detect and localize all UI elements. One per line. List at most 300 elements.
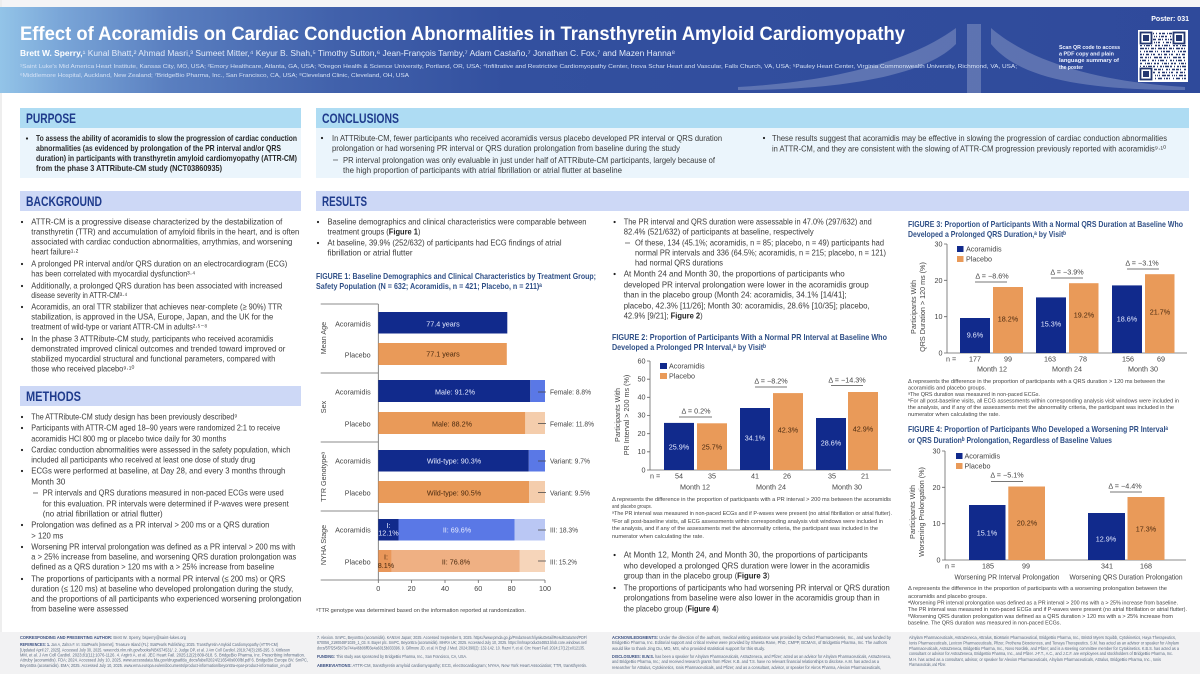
delta annotations: Δ = −8.2% — [754, 376, 788, 386]
footer: author and references: Attruby (acoramidis). FDA; 2024. Accessed July 10, 2025. www.accessdata.fda.gov/drugsatfda_docs/label/2024/216540s000lbl.pdf 6. BridgeBio Europe BV. SmPC, — [20, 658, 308, 662]
footer: references continued, funding and abbreviations: docs/5f7f2545b73e744a46b06ff03e4a6015b033396. 9. Gillmore JD, et al. N Engl J Med. 2024;390(2): 132-142. 10. Razvi Y, et al. Circ Heart Fail. 2024;17(12):e012135. — [317, 646, 585, 650]
right-hand value labels: III: 15.2% — [550, 558, 578, 566]
x axis labels: 60 — [474, 584, 482, 593]
delta annotations: Δ = −3.1% — [1125, 258, 1159, 268]
bars: month 12: 25.7% — [702, 442, 723, 452]
heading: background: BACKGROUND — [26, 193, 102, 209]
figure 2 footnotes — [612, 497, 892, 540]
background text: transthyretin (TTR) and accumulation of amyloid fibrils in the heart, and is often — [31, 226, 300, 236]
n row: 177 — [969, 354, 981, 364]
figure 2: grouped bar chart — [613, 356, 891, 492]
bars: NYHA stage: 8.1% — [378, 561, 395, 570]
treatment labels: Placebo — [345, 350, 371, 360]
background text: heart failure¹·² — [31, 246, 79, 256]
y axis title: Participants With — [909, 280, 918, 334]
figure 4 footnotes: acoramidis and placebo groups. — [908, 594, 987, 600]
results text column 1: Baseline demographics and clinical characteristics were comparable between — [328, 216, 587, 226]
footer: author and references — [20, 635, 308, 668]
n row: 156 — [1122, 354, 1134, 364]
legend: Placebo — [966, 254, 992, 264]
footer: author and references: MM, et al. J Am Coll Cardiol. 2023;81(11):1076-1126. 4. Argiró A, et al. JEC Heart Fail. 2025;12(2):809-818. 5. BridgeBio Pharma, Inc. Prescribing Information. — [20, 652, 305, 658]
n row — [945, 562, 1152, 570]
treatment labels: Placebo — [345, 488, 371, 498]
results text column 2 top: At Month 24 and Month 30, the proportions of participants who — [624, 268, 845, 278]
footer: references continued, funding and abbreviations — [317, 635, 588, 668]
bars: NYHA stage: I: — [384, 552, 388, 562]
methods text: > 120 ms — [31, 530, 63, 540]
figure 4 title — [908, 424, 1169, 445]
bars: sex: Male: 88.2% — [432, 420, 473, 428]
figure 2 title: FIGURE 2: Proportion of Participants With a Normal PR Interval at Baseline Who — [612, 332, 887, 342]
footer: disclosures continued — [909, 635, 1179, 667]
legend — [956, 452, 1000, 470]
figure 3 footnotes: ᵃThe QRS duration was measured in non-paced ECGs. — [908, 392, 1040, 398]
legend — [957, 244, 1002, 264]
results text column 2 bottom: the placebo group (Figure 4) — [624, 604, 719, 614]
figure 4: grouped bar chart — [908, 446, 1186, 582]
n row: n = — [946, 354, 956, 364]
legend: Placebo — [964, 462, 990, 470]
bars: month 24: 19.2% — [1074, 310, 1095, 320]
delta annotations — [679, 376, 866, 417]
methods text: duration (≤ 120 ms) at baseline who developed prolongation during the study, — [31, 584, 293, 594]
y axis tick labels: 40 — [638, 392, 646, 402]
footer: acknowledgments and disclosures: DISCLOSURES: B.W.S. has been a speaker for Alnylam Pharmaceuticals, AstraZeneca, and Pfizer; acted as an advisor for Alnylam Pharmaceuticals, AstraZeneca, — [612, 654, 891, 659]
legend: Acoramidis — [669, 362, 705, 370]
conclusions text left: In ATTRibute-CM, fewer participants who received acoramidis versus placebo developed PR interval or QRS duration — [332, 133, 722, 143]
poster number: Poster: 031 — [1151, 16, 1189, 23]
background text — [21, 216, 300, 374]
figure 1 title — [316, 271, 596, 291]
figure 3 footnotes: acoramidis and placebo groups. — [908, 386, 986, 392]
bars: sex: Male: 91.2% — [435, 388, 476, 396]
figure 3 footnotes: the analysis, and if any of the assessments met the abnormality criteria, the participant was included in the — [908, 405, 1174, 411]
n row: 99 — [1004, 354, 1012, 364]
methods text: Prolongation was defined as a PR interval > 200 ms or a QRS duration — [31, 520, 270, 530]
y axis tick labels: 20 — [934, 276, 942, 285]
figure 3 footnotes — [908, 379, 1179, 418]
y axis tick labels: 20 — [932, 483, 940, 492]
figure 4 footnotes: Δ represents the difference in the proportion of participants with a worsening prolongation between the — [908, 586, 1167, 592]
results text column 1: treatment groups (Figure 1) — [328, 226, 421, 236]
methods text: PR intervals and QRS durations measured in non-paced ECGs were used — [43, 488, 284, 498]
purpose text: from the phase 3 ATTRibute-CM study (NCT03860935) — [36, 163, 222, 173]
bars: TTR genotype: Wild-type: 90.3% — [427, 456, 482, 466]
y axis title: PR Interval > 200 ms (%) — [622, 375, 631, 455]
bars: worsening PR interval: 20.2% — [1017, 518, 1038, 528]
y axis tick labels: 10 — [932, 519, 940, 528]
figure 4 footnotes — [908, 586, 1187, 626]
background text: associated with cardiac conduction abnormalities, arrythmias, and worsening — [31, 236, 293, 246]
panel: results heading: RESULTS — [322, 193, 367, 209]
bars: month 30 — [1112, 274, 1174, 353]
bars: month 30: 18.6% — [1117, 314, 1138, 324]
axes — [942, 451, 1186, 560]
right-hand value labels: Female: 8.8% — [550, 388, 592, 396]
affiliations — [20, 63, 1018, 79]
n row — [946, 354, 1165, 364]
purpose text: To assess the ability of acoramidis to slow the progression of cardiac conduction — [36, 133, 297, 143]
figure 1 title: Safety Population (N = 632; Acoramidis, n = 421; Placebo, n = 211)ᵃ — [316, 281, 543, 291]
right-hand value labels: III: 18.3% — [550, 526, 579, 534]
y axis title: Participants With — [908, 485, 917, 539]
footer: references continued, funding and abbreviations: ABBREVIATIONS: ATTR-CM, transthyretin amyloid cardiomyopathy; ECG, electrocardiogram; NYHA, New York Heart Association; TTR, transthyretin. — [317, 663, 587, 668]
footer: acknowledgments and disclosures: researcher for Attralus, Cytokinetics, Ionis Pharmaceuticals, and Pfizer; and as a consultant, advisor, or speaker for Akros Pharma, Alexion Pharmaceuticals, — [612, 665, 881, 670]
y axis tick labels: 20 — [638, 429, 646, 438]
n row: 35 — [828, 472, 836, 480]
x axis labels — [376, 584, 551, 593]
n row: 35 — [708, 472, 716, 480]
purpose text: abnormalities (as evidenced by prolongation of the PR interval and/or QRS — [36, 143, 281, 153]
bars: month 30: 21.7% — [1150, 308, 1171, 316]
bars: TTR genotype: Wild-type: 90.5% — [427, 488, 482, 498]
n row: n = — [945, 562, 955, 570]
panel: results heading — [316, 191, 1189, 211]
footer: author and references: REFERENCES: 1. Jan A, Zahra F. In: StatPearls [Internet]. Treasure Island (FL): StatPearls Publishing; 2025. Transthyretin Amyloid Cardiomyopathy (ATTR-CM) — [20, 642, 278, 647]
footer: references continued, funding and abbreviations: 7. Alexion. SmPC, Beyonttra (acoramidis). KANSAI Japan; 2025. Accessed September 5, 2025. https://www.pmda.go.jp/PmdaSearch/iyakuDetail/ResultDataSet/PDF/ — [317, 635, 588, 640]
figure 3 title: Developed a Prolonged QRS Duration,ᵃ by Visitᵇ — [908, 229, 1067, 239]
results text column 2 bottom: group than in the placebo group (Figure 3) — [624, 570, 770, 580]
purpose text — [26, 133, 297, 173]
treatment labels: Acoramidis — [335, 526, 371, 534]
month labels: Month 24 — [756, 482, 786, 492]
results text column 2 bottom — [614, 550, 890, 614]
methods text: Cardiac conduction abnormalities were assessed in the safety population, which — [31, 444, 291, 454]
n row: 341 — [1101, 562, 1113, 570]
delta annotations: Δ = −3.9% — [1050, 268, 1084, 276]
panel: purpose — [20, 108, 301, 178]
methods text: The ATTRibute-CM study design has been previously described⁹ — [31, 412, 237, 422]
n row: 69 — [1157, 354, 1165, 364]
methods text: acoramidis HCl 800 mg or placebo twice daily for 30 months — [31, 434, 226, 444]
group labels: Worsening PR Interval Prolongation — [954, 572, 1060, 582]
axes — [944, 244, 1187, 353]
row group labels: NYHA Stage — [319, 525, 328, 565]
figure 4 title: or QRS Durationᵇ Prolongation, Regardless of Baseline Values — [908, 435, 1112, 445]
bars: worsening PR interval — [969, 486, 1045, 560]
treatment labels: Acoramidis — [335, 388, 371, 396]
n row: 78 — [1079, 354, 1087, 364]
background text: stabilization, is approved in the USA, Europe, Japan, and the UK for the — [31, 312, 274, 322]
treatment labels: Acoramidis — [335, 320, 371, 328]
footer: acknowledgments and disclosures: and BridgeBio Pharma, Inc.; and received research grants from Pfizer. K.B. and T.S. have no relevant financial relationships to disclose. A.M. has acted as a — [612, 659, 879, 664]
background text: Additionally, a prolonged QRS duration has been associated with increased — [31, 280, 283, 290]
n row: 21 — [861, 472, 869, 480]
methods text: included all participants who received at least one dose of study drug — [31, 454, 256, 464]
figure 3: grouped bar chart — [909, 240, 1187, 374]
methods text: a > 25% increase from baseline, and worsening QRS duration prolongation was — [31, 552, 296, 562]
bars: TTR genotype — [378, 450, 545, 503]
n row: 185 — [982, 562, 994, 570]
figure 2 footnotes: ᵃThe PR interval was measured in non-paced ECGs and if P-waves were present (no atrial fibrillation or atrial flutter). — [612, 511, 892, 517]
legend: Acoramidis — [964, 452, 1000, 460]
figure 1: stacked bar chart — [319, 304, 595, 593]
bars: NYHA stage: I: — [386, 521, 390, 530]
bars: month 12 — [960, 287, 1023, 353]
figure 2 footnotes: the analysis, and if any of the assessments met the abnormality criteria, the participant was included in the — [612, 526, 878, 532]
bars: NYHA stage — [378, 519, 545, 572]
decorative logo arcs — [738, 24, 1185, 93]
conclusions text left — [321, 133, 722, 175]
y axis tick labels: 10 — [638, 447, 646, 456]
methods text: and the proportions of all participants who experienced worsening prolongation — [31, 594, 302, 604]
footer: author and references: CORRESPONDING AND PRESENTING AUTHOR: Brett W. Sperry, bsperry@saint-lukes.org — [20, 635, 186, 640]
icon: QR code — [1138, 30, 1188, 82]
legend: Acoramidis — [966, 244, 1002, 254]
n row: 41 — [751, 472, 759, 480]
n row: 26 — [783, 472, 791, 480]
figure 2 footnotes: Δ represents the difference in the proportion of participants with a PR interval > 200 ms between the acoramidis — [612, 497, 891, 503]
n row: 54 — [675, 472, 683, 480]
results text column 2 bottom: who developed a prolonged QRS duration were lower in the acoramidis — [623, 560, 870, 570]
row group labels: Sex — [319, 400, 328, 413]
delta annotations: Δ = −5.1% — [990, 470, 1024, 480]
month labels: Month 24 — [1052, 364, 1082, 374]
treatment labels: Placebo — [345, 558, 371, 566]
row group labels: Mean Age — [319, 322, 328, 354]
panel: background — [20, 191, 301, 374]
results text column 2 top: 82.4% (521/632) of participants at baseline, respectively — [624, 226, 814, 236]
heading: methods: METHODS — [26, 388, 81, 404]
results text column 2 top: The PR interval and QRS duration were assessable in 47.0% (297/632) and — [624, 216, 872, 226]
methods text: Participants with ATTR-CM aged 18–90 years were randomized 2:1 to receive — [31, 422, 281, 432]
methods text — [21, 412, 302, 614]
bars: NYHA stage: II: 76.8% — [442, 558, 471, 566]
legend — [660, 362, 705, 380]
n row: 168 — [1140, 562, 1152, 570]
figure 4 footnotes: The PR interval was measured in non-paced ECGs and if P-waves were present (no atrial fibrillation or atrial flutter). — [908, 607, 1187, 613]
bars: month 24 — [1036, 283, 1098, 353]
n row — [650, 472, 869, 480]
footer: references continued, funding and abbreviations: 870056_2190048F1029_1_03. 8. Bayer plc. SmPC, Beyonttra (acoramidis). MHRA UK; 2025. Accessed July 10, 2025. https://mhraproducts4853.blob.core.windows.net/ — [317, 640, 588, 645]
bars: sex — [378, 380, 545, 434]
results text column 2 top — [614, 216, 886, 320]
QR caption: a PDF copy and plain — [1059, 52, 1114, 58]
delta annotations: Δ = −14.3% — [828, 376, 866, 384]
background text: disease severity in ATTR-CM³·⁴ — [31, 290, 128, 300]
legend: Placebo — [669, 372, 695, 380]
QR caption: language summary of — [1059, 58, 1119, 64]
footer: acknowledgments and disclosures — [612, 635, 892, 670]
conclusions text right — [763, 133, 1167, 154]
y axis tick labels: 30 — [932, 446, 940, 456]
y axis tick labels: 30 — [934, 240, 942, 248]
bars: mean age: 77.1 years — [426, 350, 460, 358]
conclusions text left: prolongation or had worsening PR interval or QRS duration prolongation from baseline during the study — [332, 143, 681, 153]
figure 3 footnotes: numerator when calculating the rate. — [908, 412, 1000, 418]
figure 4 footnotes: ᵃWorsening PR interval prolongation was defined as a PR interval > 200 ms with a > 25% increase from baseline. — [908, 600, 1178, 606]
results text column 2 top: Of these, 134 (45.1%; acoramidis, n = 85; placebo, n = 49) participants had — [635, 238, 884, 248]
panel: methods — [20, 386, 302, 614]
row group labels: TTR Genotypeᵃ — [319, 452, 328, 502]
authors: Brett W. Sperry, ¹ Kunal Bhatt,² Ahmad Masri,³ Sumeet Mitter,⁴ Keyur B. Shah,⁵ Timothy Sutton,⁶ Jean-François Tamby,⁷ Adam Castaño,⁷ Jonathan C. Fox,⁷ and Mazen Hanna⁸ — [20, 49, 675, 58]
methods text: from baseline were assessed — [31, 604, 129, 614]
title: Effect of Acoramidis on Cardiac Conduction Abnormalities in Transthyretin Amyloid Cardiomyopathy — [20, 24, 905, 45]
QR caption — [1059, 45, 1120, 71]
QR caption: the poster — [1059, 65, 1083, 71]
affiliations: ¹Saint Luke's Mid America Heart Institute, Kansas City, MO, USA; ²Emory Healthcare, Atlanta, GA, USA; ³Oregon Health & Science University, Portland, OR, USA; ⁴Infiltrative and Restrictive Cardiomyopathy Center, Inova Schar Heart and Vascular, Falls Church, VA, USA; ⁵Pauley Heart Center, Virginia Commonwealth University, Richmond, VA, USA; — [20, 63, 1018, 70]
month labels: Month 30 — [1128, 364, 1158, 374]
treatment labels — [335, 320, 371, 566]
bars: month 30: 42.9% — [853, 424, 874, 434]
conclusions text left: PR interval prolongation was only evaluable in just under half of ATTRibute-CM participants, largely because of — [343, 155, 716, 165]
purpose text: duration) in participants with transthyretin amyloid cardiomyopathy (ATTR-CM) — [36, 153, 297, 163]
background text: ATTR-CM is a progressive disease characterized by the destabilization of — [31, 216, 283, 226]
methods text: defined as a QRS duration > 120 ms with a > 25% increase from baseline — [31, 562, 275, 572]
bars: worsening PR interval: 15.1% — [977, 528, 998, 538]
figure 1 title: FIGURE 1: Baseline Demographics and Clinical Characteristics by Treatment Group; — [316, 271, 596, 281]
footer: disclosures continued: M.H. has acted as a consultant, advisor, or speaker for Alexion Pharmaceuticals, Alnylam Pharmaceuticals, Attralus, BridgeBio Pharma, Inc., Ionis — [909, 657, 1162, 662]
bars: worsening QRS duration: 12.9% — [1096, 534, 1117, 544]
results text column 2 bottom: At Month 12, Month 24, and Month 30, the proportions of participants — [624, 550, 868, 560]
row group labels — [319, 322, 328, 565]
y axis title: Participants With — [613, 388, 622, 442]
delta annotations — [975, 258, 1159, 282]
n row: 99 — [1022, 562, 1030, 570]
results text column 2 top: 42.9% [9/21]; Figure 2) — [624, 310, 703, 320]
heading: conclusions: CONCLUSIONS — [322, 110, 399, 126]
conclusions text left: the high proportion of participants with atrial fibrillation or atrial flutter at baseline — [343, 165, 622, 175]
heading: purpose: PURPOSE — [26, 110, 76, 126]
conclusions text right: in ATTR-CM, and they are consistent with the slowing of ATTR-CM progression previously reported with acoramidis⁹·¹⁰ — [772, 144, 1166, 154]
bars: month 30 — [816, 392, 878, 470]
x axis labels: 0 — [376, 584, 380, 593]
methods text: (no atrial fibrillation or atrial flutter) — [43, 508, 163, 518]
y axis tick labels — [638, 356, 646, 474]
bars: NYHA stage: II: 69.6% — [443, 526, 472, 534]
group labels: Worsening QRS Duration Prolongation — [1070, 572, 1182, 582]
figure 2 footnotes: and placebo groups. — [612, 504, 652, 510]
right-hand value labels: Variant: 9.5% — [550, 488, 591, 498]
figure 3 footnotes: ᵇFor all post-baseline visits, all ECG assessments within corresponding analysis visit windows were included in — [908, 398, 1179, 404]
header banner — [0, 7, 1200, 93]
results text column 2 top: had normal QRS durations — [635, 258, 723, 268]
background text: demonstrated improved clinical outcomes and trended toward improved or — [31, 344, 286, 354]
bars: month 12: 9.6% — [967, 330, 984, 340]
y axis tick labels: 0 — [938, 348, 942, 358]
bars: month 24: 34.1% — [745, 434, 766, 442]
month labels — [680, 482, 862, 492]
results text column 2 bottom: The proportions of participants who had worsening PR interval or QRS duration — [624, 582, 890, 592]
footer: acknowledgments and disclosures: would like to thank Jing Du, MD, MS, who provided statistical support for this study. — [612, 646, 765, 651]
figure 3 footnotes: Δ represents the difference in the proportion of participants with a QRS duration > 120 ms between the — [908, 379, 1165, 385]
right-hand value labels: Female: 11.8% — [550, 420, 595, 428]
affiliations: ⁶Middlemore Hospital, Auckland, New Zealand; ⁷BridgeBio Pharma, Inc., San Francisco, CA, USA; ⁸Cleveland Clinic, Cleveland, OH, USA — [20, 72, 409, 79]
results text column 1: At baseline, 39.9% (252/632) of participants had ECG findings of atrial — [328, 238, 562, 248]
y axis title — [908, 467, 926, 557]
y axis tick labels: 0 — [936, 556, 940, 564]
bars: worsening QRS duration — [1088, 497, 1164, 560]
footer: disclosures continued: Pharmaceuticals, and Pfizer. — [909, 662, 946, 667]
bars: month 12: 25.9% — [669, 442, 690, 452]
background text: treatment of wild-type or variant ATTR-CM in adults²·⁵⁻⁸ — [31, 322, 207, 332]
results text column 1: fibrillation or atrial flutter — [328, 248, 413, 258]
delta annotations — [990, 470, 1142, 492]
y axis tick labels: 60 — [638, 356, 646, 366]
results text column 2 top: normal PR intervals and 336 (64.5%; acoramidis, n = 215; placebo, n = 121) — [635, 248, 886, 258]
figure 2 footnotes: numerator when calculating the rate. — [612, 534, 704, 540]
figure 2 title: Developed a Prolonged PR Interval,ᵃ by Visitᵇ — [612, 342, 767, 352]
y axis tick labels: 0 — [642, 466, 646, 474]
footer: author and references: [Updated April 27, 2025]. Accessed July 30, 2025. www.ncbi.nlm.nih.gov/books/NBK574531/. 2. Judge DP, et al. J Am Coll Cardiol. 2019;74(3):285-295. 3. Kittleson — [20, 648, 290, 652]
panel: conclusions — [316, 108, 1189, 178]
footer: author and references: Beyonttra (acoramidis). EMA; 2025. Accessed July 10, 2025. www.ema.europa.eu/en/documents/product-information/beyonttra-epar-product-information_en.pdf — [20, 663, 292, 668]
n row: n = — [650, 472, 660, 480]
footer: references continued, funding and abbreviations: FUNDING: This study was sponsored by BridgeBio Pharma, Inc., San Francisco, CA, USA. — [317, 654, 467, 659]
bars: worsening QRS duration: 17.3% — [1136, 524, 1157, 534]
treatment labels: Acoramidis — [335, 456, 371, 466]
month labels — [977, 364, 1158, 374]
y axis title — [909, 262, 927, 352]
y axis title: QRS Duration > 120 ms (%) — [918, 262, 927, 352]
figure 2 footnotes: ᵇFor all post-baseline visits, all ECG assessments within corresponding analysis visit windows were included in — [612, 518, 883, 525]
background text: has been correlated with myocardial dysfunction³·⁴ — [31, 268, 196, 278]
background text: stabilized myocardial structural and functional parameters, compared with — [31, 354, 276, 364]
x axis labels: 20 — [408, 584, 416, 593]
results text column 2 bottom: prolongations from baseline were also lower in the acoramidis group than in — [624, 592, 880, 602]
delta annotations: Δ = 0.2% — [682, 406, 711, 416]
delta annotations: Δ = −8.6% — [975, 272, 1009, 280]
methods text: Worsening PR interval prolongation was defined as a PR interval > 200 ms with — [31, 542, 296, 552]
bars: mean age: 77.4 years — [426, 320, 460, 328]
treatment labels: Placebo — [345, 420, 371, 428]
x axis labels: 40 — [441, 584, 449, 593]
background text: those who received placebo⁹·¹⁰ — [31, 364, 134, 374]
x axis labels: 80 — [508, 584, 516, 593]
y axis tick labels: 50 — [638, 374, 646, 384]
background text: A prolonged PR interval and/or QRS duration on an electrocardiogram (ECG) — [31, 258, 288, 268]
bars: month 12: 18.2% — [998, 314, 1019, 324]
footer: acknowledgments and disclosures: ACKNOWLEDGMENTS: Under the direction of the authors, medical writing assistance was provided by Oxford PharmaGenesis, Inc., and was funded by — [612, 635, 892, 640]
bars: month 24: 15.3% — [1041, 320, 1062, 328]
axes — [647, 361, 891, 470]
background text: In the phase 3 ATTRibute-CM study, participants who received acoramidis — [31, 334, 273, 344]
bars: month 24 — [740, 393, 803, 470]
y axis title: Worsening Prolongation (%) — [917, 467, 926, 557]
QR caption: Scan QR code to access — [1059, 45, 1120, 51]
figure 4 footnotes: ᵇWorsening QRS duration prolongation was defined as a QRS duration > 120 ms with a > 25% increase from — [908, 613, 1173, 620]
y axis tick labels — [932, 446, 940, 564]
methods text: ECGs were performed at baseline, at Day 28, and every 3 months through — [31, 466, 286, 476]
frame lines — [321, 304, 545, 583]
results text column 2 top: developed PR interval prolongation were lower in the acoramidis group — [624, 280, 869, 290]
figure 2 title — [612, 332, 887, 352]
group labels — [954, 572, 1182, 582]
right-hand value labels — [550, 388, 595, 566]
bars: month 12 — [664, 423, 727, 470]
month labels: Month 12 — [977, 364, 1007, 374]
bars: month 24: 42.3% — [778, 426, 799, 434]
figure 4 footnotes: baseline. The QRS duration was measured in non-paced ECGs. — [908, 620, 1061, 626]
month labels: Month 30 — [832, 482, 862, 492]
footer: acknowledgments and disclosures: BridgeBio Pharma, Inc. Editorial support and critical review were provided by Shweta Rane, PhD, CMPP, BCMAS, of BridgeBio Pharma, Inc. The authors — [612, 640, 888, 645]
background text: Acoramidis, an oral TTR stabilizer that achieves near-complete (≥ 90%) TTR — [31, 302, 282, 312]
bars: month 30: 28.6% — [821, 438, 842, 448]
bars: NYHA stage: 12.1% — [378, 528, 399, 538]
results text column 2 top: than in the placebo group (Month 24: acoramidis, 34.1% [14/41]; — [624, 290, 847, 300]
right-hand value labels: Variant: 9.7% — [550, 456, 591, 466]
y axis title — [613, 375, 631, 455]
methods text: for this evaluation. PR intervals were determined if P-waves were present — [43, 498, 289, 508]
delta annotations: Δ = −4.4% — [1108, 482, 1142, 490]
x axis labels: 100 — [539, 584, 551, 593]
y axis tick labels: 30 — [638, 410, 646, 420]
figure 3 title — [908, 219, 1183, 239]
y axis tick labels: 10 — [934, 312, 942, 321]
leader lines — [538, 392, 546, 561]
results text column 2 top: placebo, 42.3% [11/26]; Month 30: acoramidis, 28.6% [10/35]; placebo, — [624, 300, 870, 310]
methods text: The proportions of participants with a normal PR interval (≤ 200 ms) or QRS — [31, 574, 286, 584]
